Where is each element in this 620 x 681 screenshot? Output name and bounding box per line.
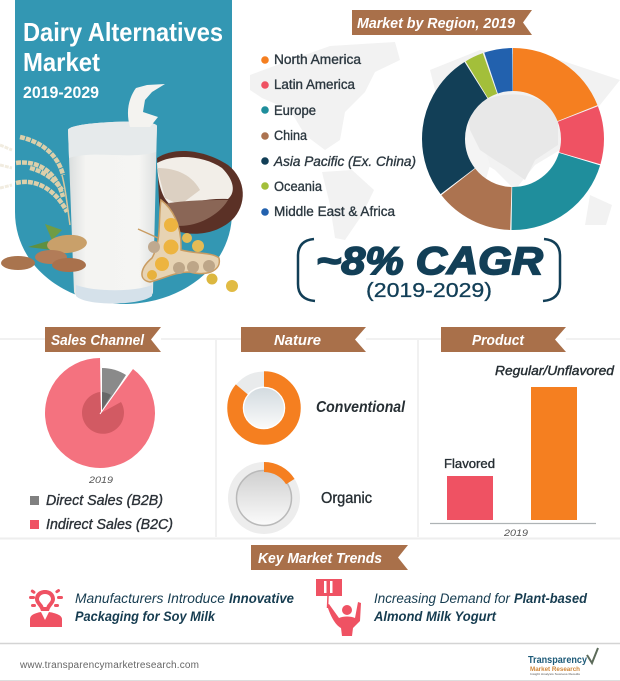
text: trend 2: Almond Milk Yogurt — [373, 608, 497, 624]
legend item: China — [261, 128, 307, 143]
icon: person holding sign — [316, 579, 361, 636]
legend item: Middle East & Africa: Middle East & Africa — [274, 204, 395, 219]
icon: coconut — [157, 151, 243, 234]
callout: CAGR: (2019-2029) — [366, 280, 492, 302]
legend item: North America: North America — [274, 52, 361, 67]
title: Dairy Alternatives — [23, 17, 223, 47]
section dividers — [0, 339, 620, 538]
donut chart: market by region — [444, 70, 582, 208]
icon: rice stalks — [16, 137, 67, 212]
bracket: left — [298, 239, 315, 301]
ribbon: Sales Channel — [45, 327, 161, 352]
legend item: Europe: Europe — [274, 103, 316, 118]
title — [23, 17, 223, 102]
ribbon: Nature: Nature — [274, 332, 321, 349]
text: trend 1: Packaging for Soy Milk — [75, 608, 216, 624]
ribbon: Product: Product — [472, 332, 525, 349]
ribbon: Market by Region — [352, 10, 532, 35]
ribbon: Nature — [241, 327, 366, 352]
logo: Transparency Market Research: Transparency — [528, 654, 587, 666]
bar chart: product: Flavored — [444, 456, 495, 471]
text: trend 2: Plant-based — [514, 590, 587, 606]
legend item: Oceania: Oceania — [274, 179, 322, 194]
hero panel: blue shield with product illustration — [0, 0, 243, 304]
title: 2019-2029 — [23, 83, 99, 102]
text: trend 2 — [373, 590, 587, 624]
legend item: Asia Pacific: Asia Pacific (Ex. China) — [273, 154, 416, 169]
logo: Transparency Market Research: Market Research — [530, 666, 580, 673]
legend item: Indirect Sales: Indirect Sales (B2C) — [46, 517, 173, 533]
bar chart: product: 2019 — [503, 528, 529, 539]
text: trend 1: Manufacturers Introduce — [75, 590, 225, 606]
text: trend 1: Innovative — [229, 590, 294, 606]
ribbon: Key Market Trends — [251, 545, 408, 570]
bar chart: product: Regular/Unflavored — [495, 363, 615, 378]
label: Organic: Organic — [321, 490, 372, 507]
ring chart: Organic — [228, 462, 300, 534]
ring chart: Conventional — [235, 379, 293, 437]
logo: Transparency Market Research: Insight Analysis Success Results — [530, 672, 581, 676]
bracket: right — [543, 239, 560, 301]
legend item: Direct Sales: Direct Sales (B2B) — [46, 493, 163, 509]
text: trend 2: Increasing Demand for — [374, 590, 511, 606]
icon: soybean pods — [138, 200, 238, 292]
legend item: China: China — [274, 128, 307, 143]
ribbon: Market by Region: Market by Region, 2019 — [357, 15, 516, 32]
bar: Flavored — [447, 476, 493, 520]
map seen through donut hole — [468, 94, 558, 180]
ribbon: Sales Channel: Sales Channel — [51, 332, 145, 349]
icon: person with light bulb — [29, 588, 63, 627]
world map background — [250, 42, 620, 240]
legend: sales channel — [30, 493, 173, 533]
ribbon: Product — [441, 327, 566, 352]
label: year: 2019 — [88, 475, 114, 486]
callout: CAGR — [298, 239, 560, 302]
footer url: www.transparencymarketresearch.com — [19, 660, 199, 671]
text: trend 1 — [75, 590, 294, 624]
legend: regions — [261, 52, 416, 219]
callout: CAGR: ~8% CAGR — [316, 240, 543, 283]
title: Market — [23, 47, 100, 77]
logo: Transparency Market Research — [528, 648, 598, 676]
bar: Regular/Unflavored — [531, 387, 577, 520]
footer dividers — [0, 642, 620, 644]
pie chart: sales channel — [45, 358, 155, 468]
icon: almonds — [1, 224, 88, 272]
label: Conventional: Conventional — [316, 399, 406, 416]
icon: glass of milk — [68, 84, 165, 304]
bar chart: product — [430, 363, 615, 539]
legend item: Latin America: Latin America — [274, 77, 355, 92]
ribbon: Key Market Trends: Key Market Trends — [258, 550, 382, 567]
